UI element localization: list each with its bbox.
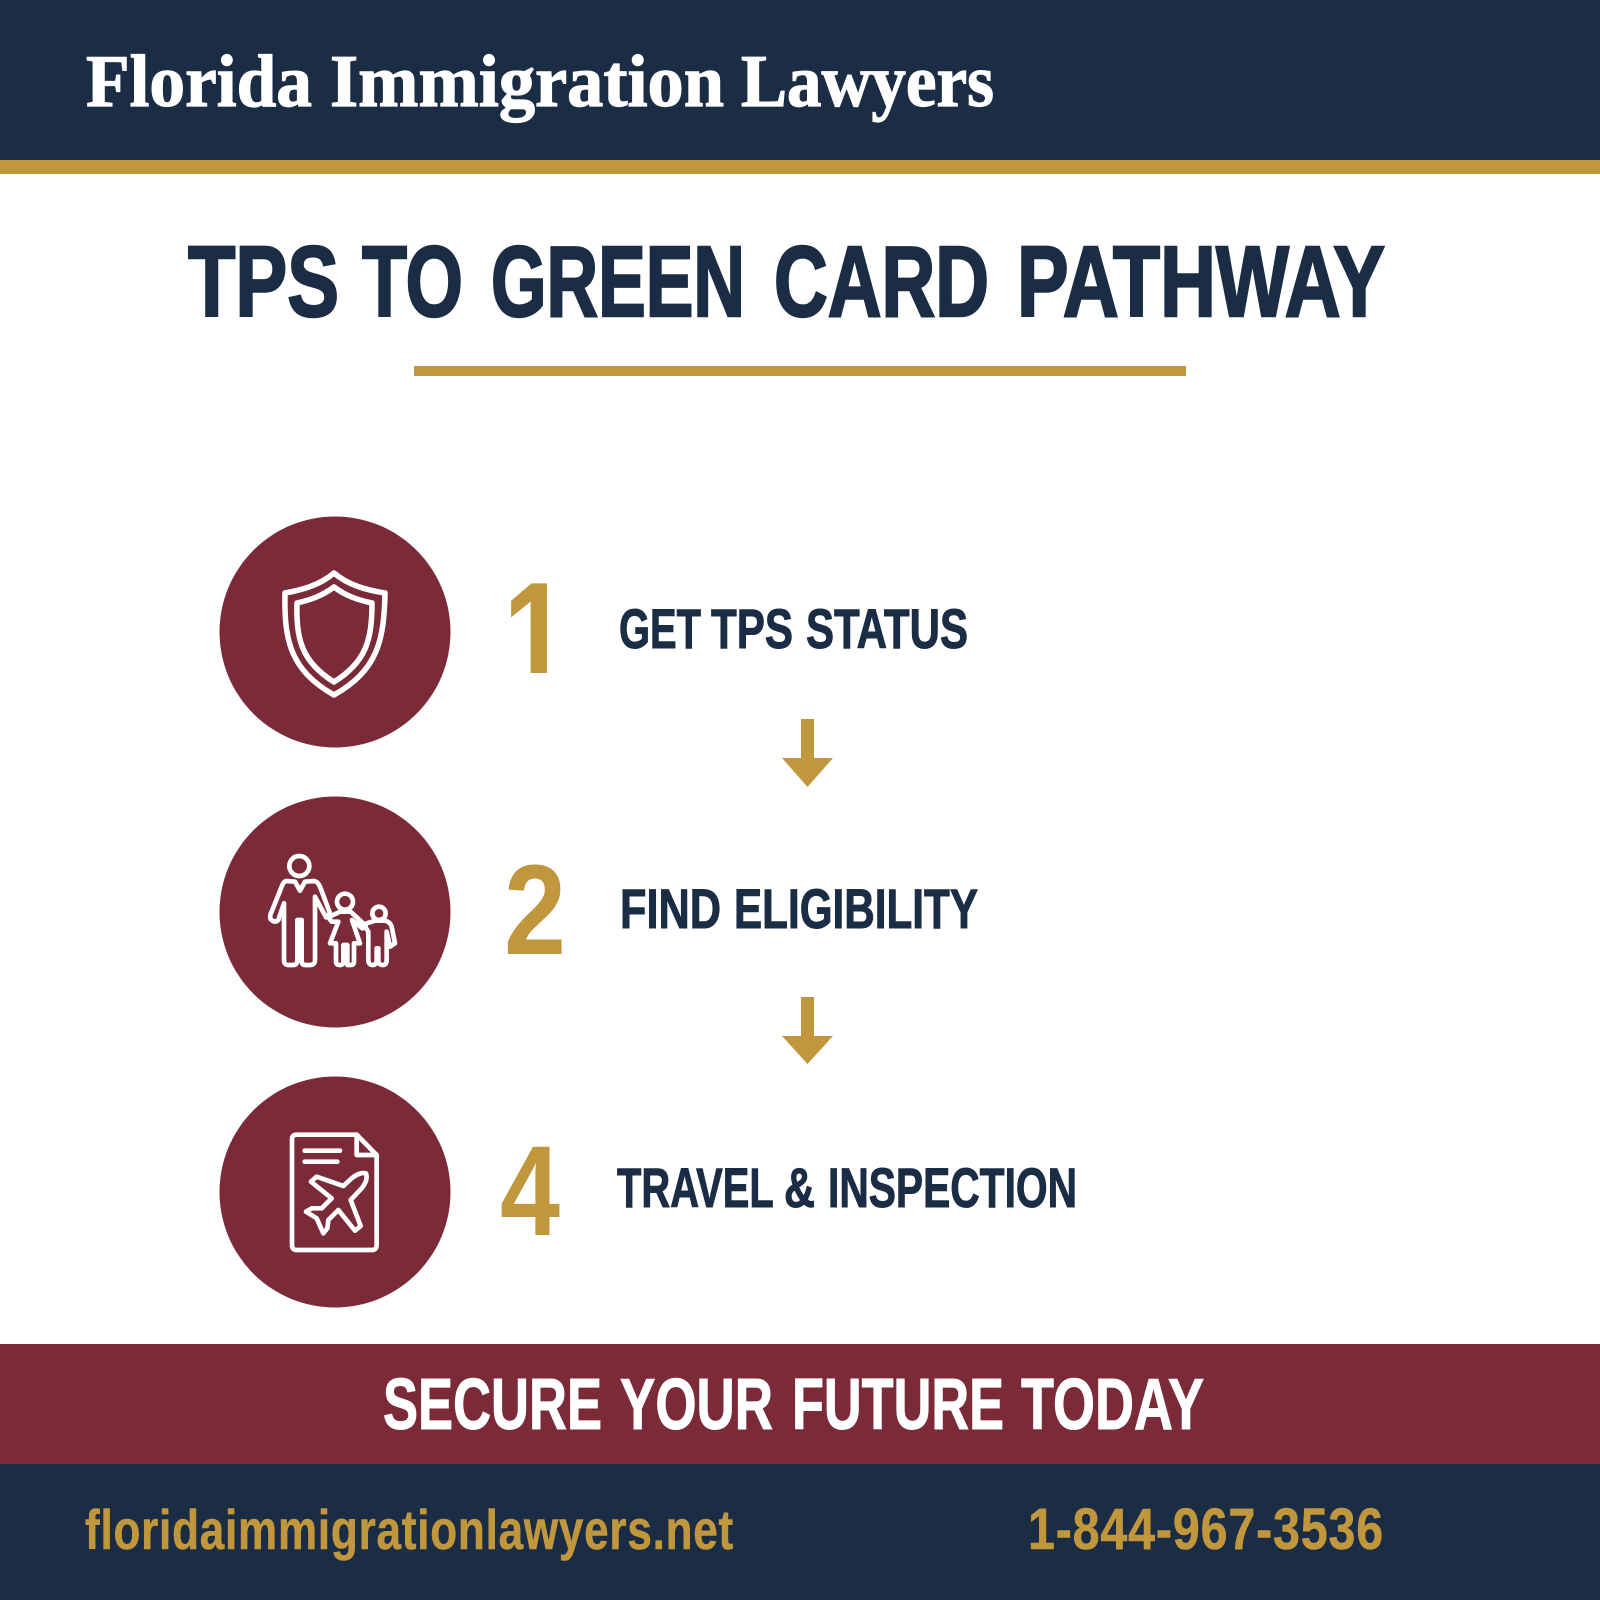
firm name: Florida — [86, 41, 312, 123]
call to action text: SECURE — [383, 1365, 602, 1445]
firm name: Lawyers — [741, 41, 994, 123]
title underline — [414, 366, 1186, 376]
website: floridaimmigrationlawyers.net — [85, 1498, 734, 1561]
label: travel and inspection: INSPECTION — [828, 1156, 1077, 1219]
phone: 1-844-967-3536 — [1028, 1497, 1384, 1562]
label: find eligibility: FIND — [620, 877, 721, 940]
label: get TPS status: GET — [619, 597, 701, 660]
icon: travel document — [220, 1076, 450, 1308]
title: CARD — [774, 226, 989, 338]
number 2: 2 — [504, 839, 566, 982]
call to action text: FUTURE — [792, 1365, 1004, 1445]
arrow 2 to 3 — [782, 997, 833, 1064]
footer band — [0, 1464, 1600, 1600]
number 1: 1 — [503, 550, 569, 723]
step 1 — [220, 516, 968, 748]
arrow 1 to 2 — [782, 719, 833, 787]
title: TPS — [188, 226, 339, 338]
label: get TPS status: STATUS — [806, 597, 968, 660]
number 4: 4 — [500, 1120, 560, 1263]
call to action band — [0, 1344, 1600, 1464]
label: get TPS status: TPS — [711, 597, 793, 660]
call to action text: YOUR — [620, 1365, 773, 1445]
step 2 — [220, 796, 978, 1028]
header band — [0, 0, 1600, 174]
firm name: Immigration — [330, 41, 724, 123]
label: travel and inspection: & — [784, 1156, 815, 1219]
label: travel and inspection: TRAVEL — [617, 1156, 773, 1219]
step 3 — [220, 1076, 1077, 1308]
icon: shield — [220, 516, 450, 748]
title: GREEN — [491, 226, 745, 338]
label: find eligibility: ELIGIBILITY — [734, 877, 978, 940]
call to action text: TODAY — [1021, 1365, 1204, 1445]
title: PATHWAY — [1017, 226, 1385, 338]
icon: family — [220, 796, 450, 1028]
title: TO — [362, 226, 463, 338]
